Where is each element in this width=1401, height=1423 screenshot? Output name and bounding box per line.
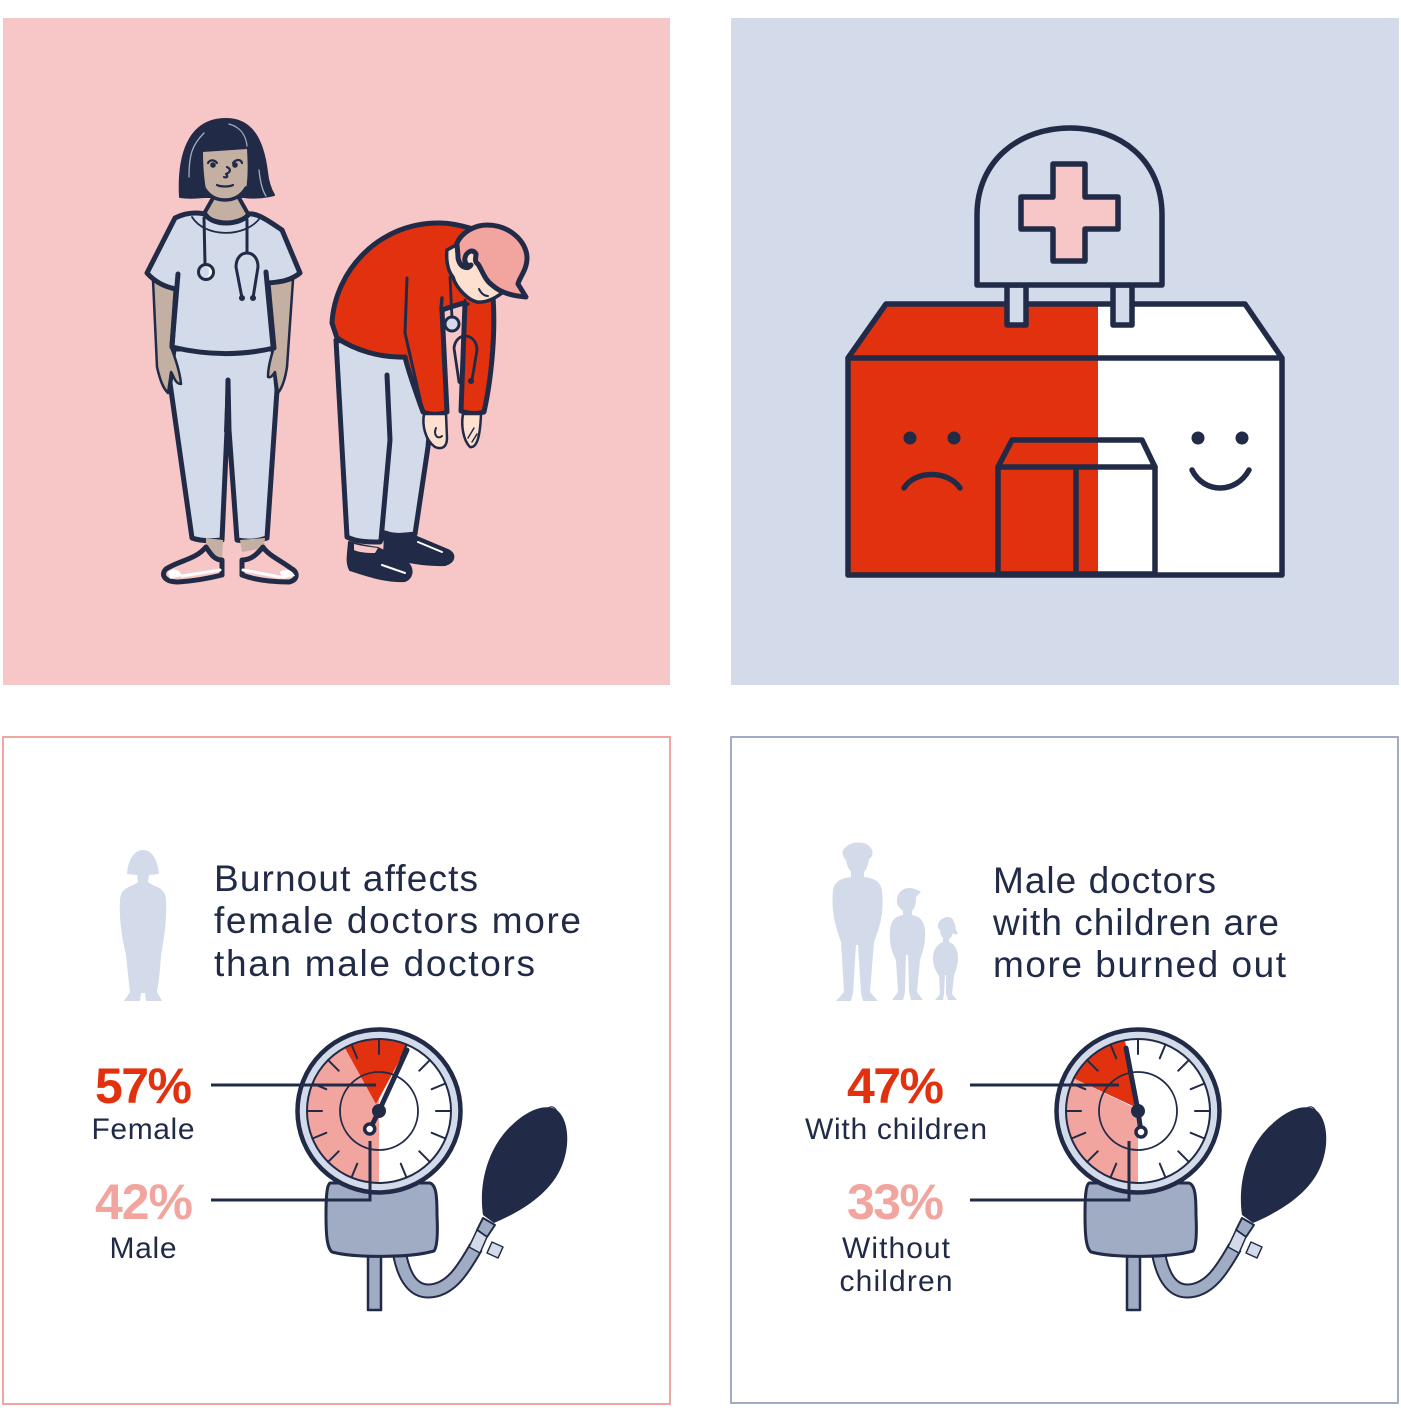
stat: with children 47%: With children: [805, 1113, 987, 1146]
stat: with children 47%: 47%: [847, 1058, 944, 1114]
heading: more burned out: [993, 944, 1287, 985]
leader lines: [970, 1085, 1129, 1200]
sad face: [904, 432, 960, 488]
stat: female 57%: 57%: [95, 1058, 192, 1114]
stat: without children 33%: Without: [842, 1232, 951, 1265]
blood pressure gauge: [1056, 1030, 1326, 1310]
stat: without children 33%: [840, 1174, 952, 1298]
panel: male doctors with children: [731, 737, 1398, 1403]
icon: female silhouette: [120, 850, 166, 1001]
stat: female 57%: Female: [92, 1113, 194, 1146]
male doctor figure: [332, 223, 527, 581]
heading: Male doctors: [993, 860, 1216, 901]
heading: with children are: [992, 902, 1279, 943]
icon: family silhouettes: [832, 842, 958, 1001]
panel: female vs male burnout: [3, 737, 670, 1404]
stat: without children 33%: 33%: [847, 1174, 944, 1230]
panel: clinic illustration: [731, 18, 1399, 685]
blood pressure gauge: [298, 1030, 567, 1310]
female doctor figure: [147, 119, 300, 582]
stat: male 42%: Male: [110, 1232, 176, 1265]
heading: Burnout affects: [214, 858, 478, 899]
clinic building: [848, 128, 1282, 575]
sign with medical cross: [977, 128, 1162, 325]
panel: burnt-out doctors illustration: [3, 18, 670, 685]
happy face: [1192, 432, 1249, 488]
stat: male 42%: 42%: [95, 1174, 193, 1230]
stat: female 57%: [92, 1058, 194, 1146]
heading: than male doctors: [214, 943, 535, 984]
heading: female doctors more: [214, 900, 581, 941]
heading: [214, 858, 581, 984]
stat: with children 47%: [805, 1058, 987, 1146]
stat: male 42%: [95, 1174, 193, 1265]
stat: without children 33%: children: [840, 1265, 952, 1298]
small entrance block: [998, 440, 1155, 574]
heading: [992, 860, 1287, 985]
leader lines: [211, 1085, 376, 1200]
